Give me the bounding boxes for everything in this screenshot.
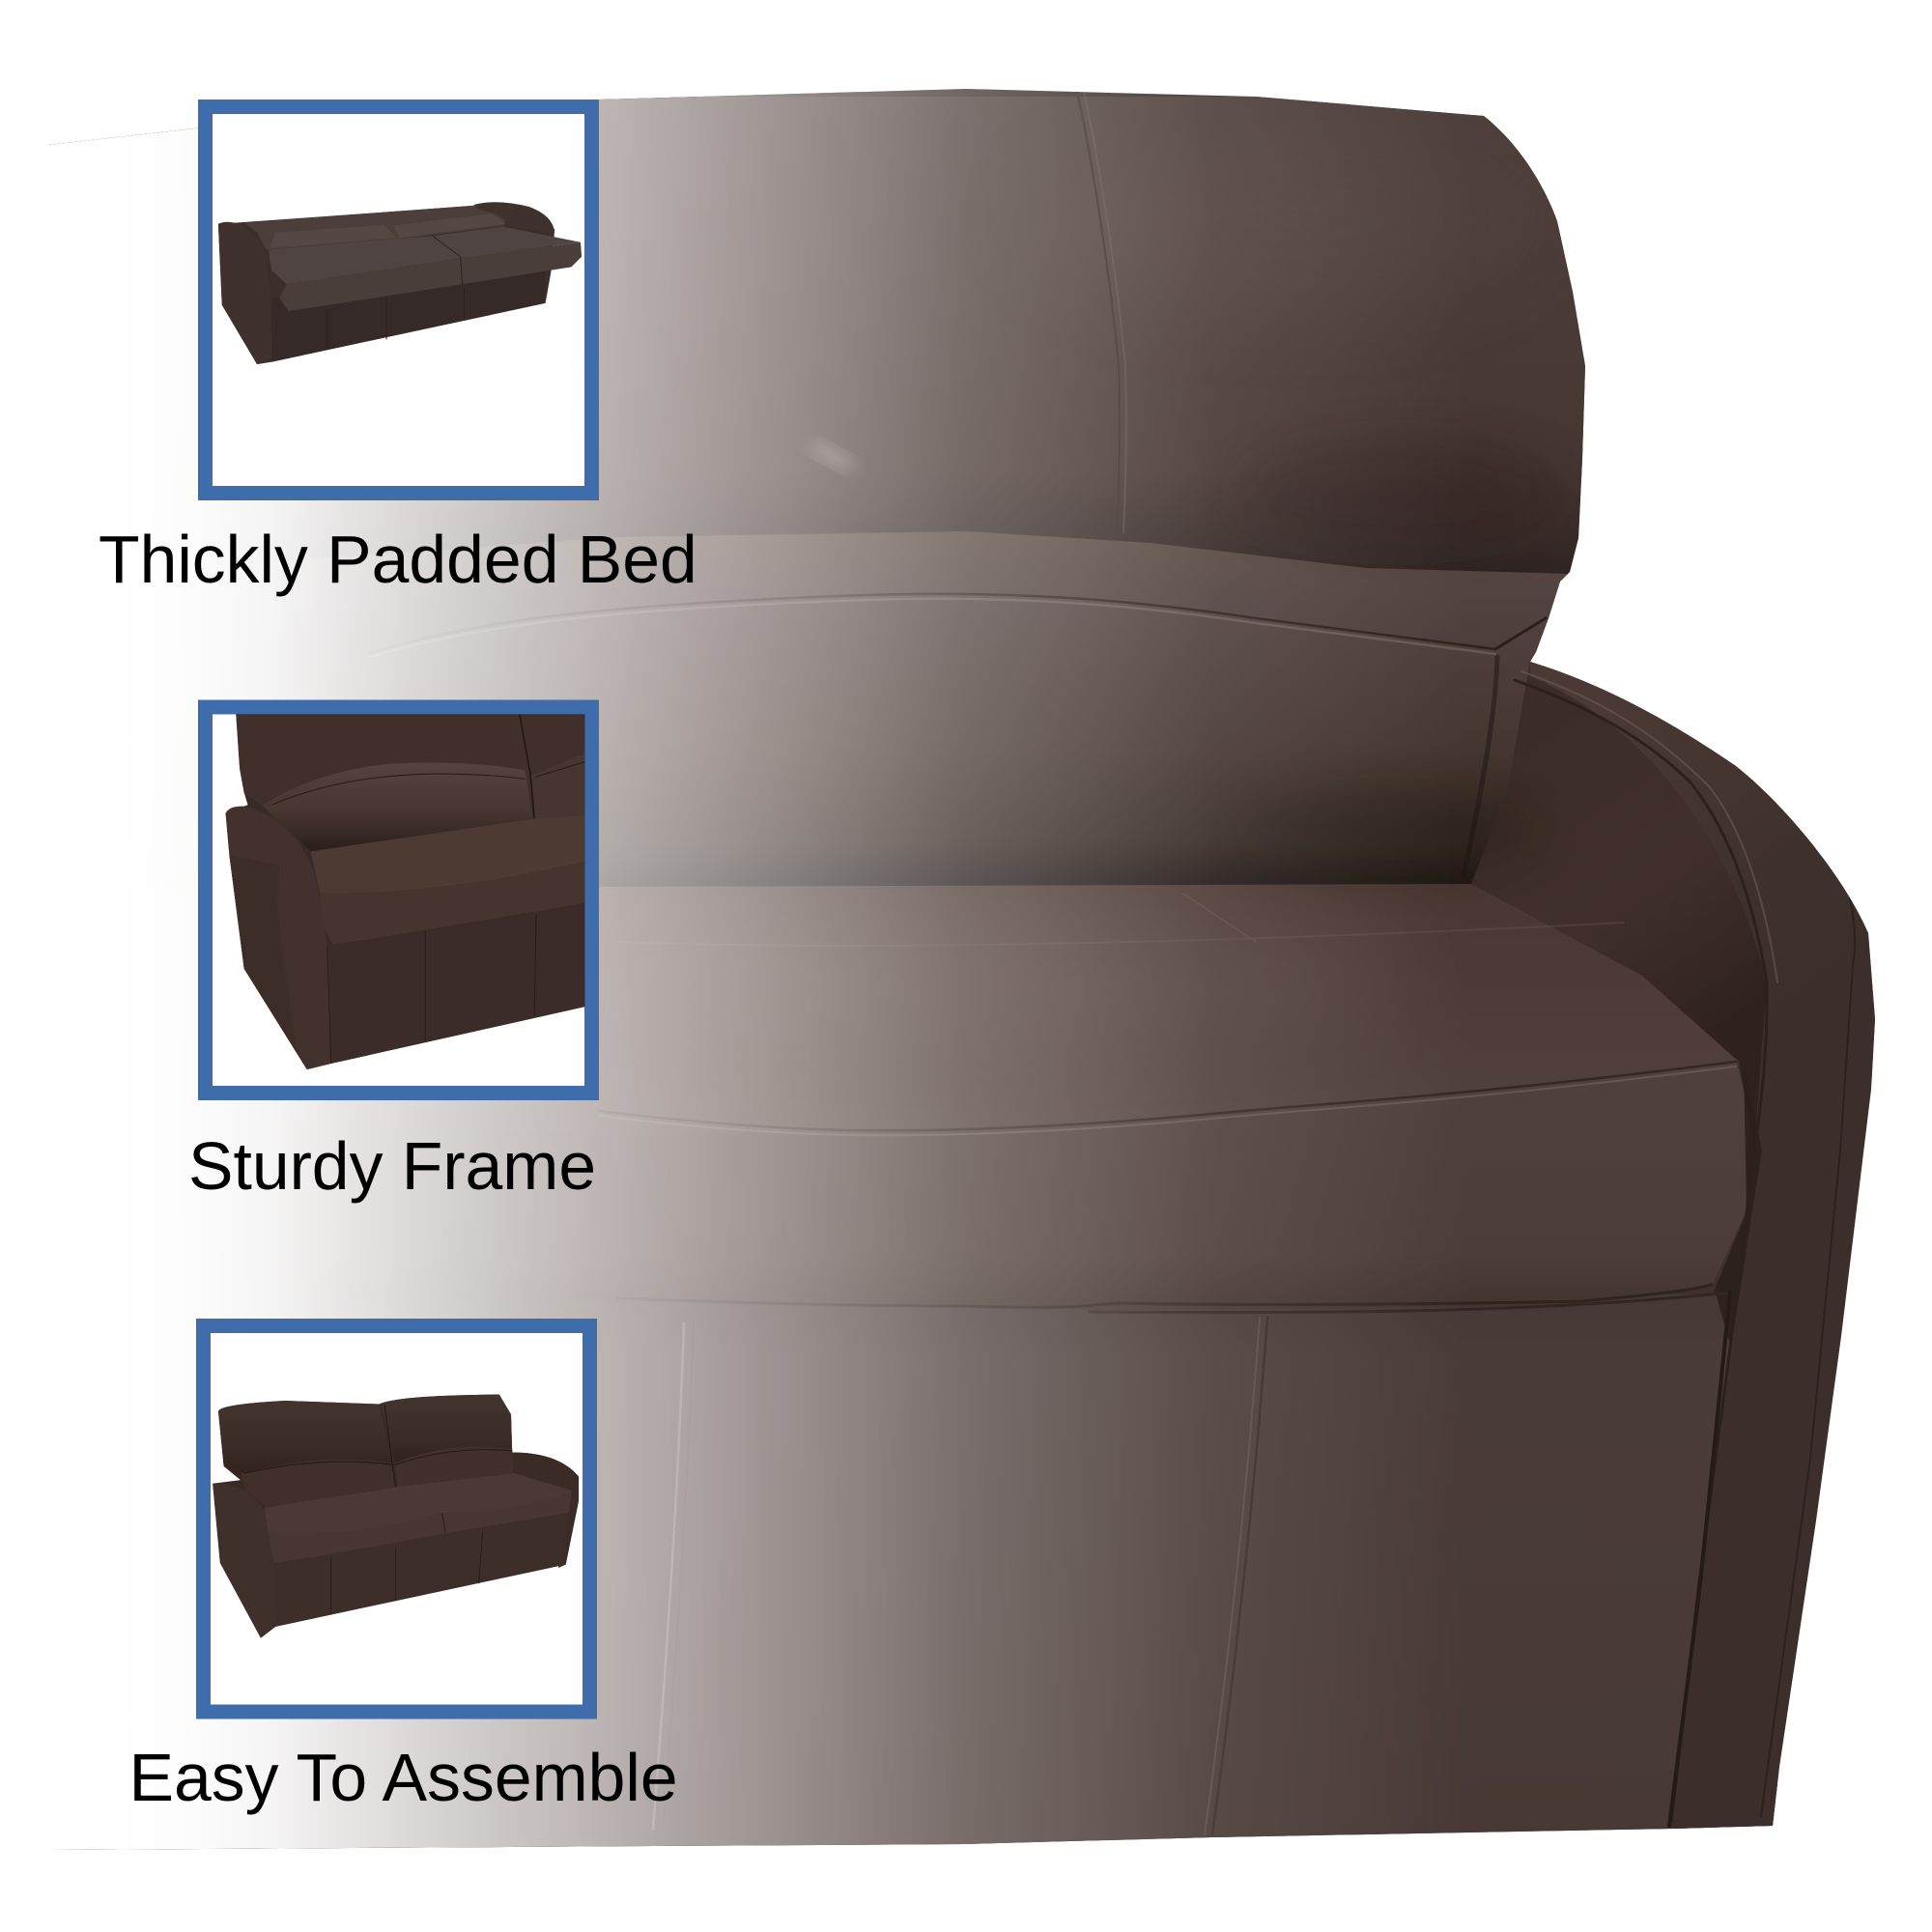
feature 2: caption: Sturdy Frame bbox=[188, 1128, 596, 1204]
blue frame bbox=[205, 106, 591, 493]
blue frame bbox=[203, 1325, 589, 1712]
sofa corner thumbnail bbox=[226, 714, 585, 1069]
feature 3: caption: Easy To Assemble bbox=[129, 1740, 678, 1815]
feature 3: thumbnail frame bbox=[203, 1325, 589, 1712]
stitched seams bbox=[370, 92, 1855, 1834]
feature 2: thumbnail frame bbox=[205, 707, 591, 1094]
headrest cushion bbox=[39, 97, 1604, 580]
blue frame bbox=[205, 707, 591, 1094]
feature 1: caption: Thickly Padded Bed bbox=[99, 522, 697, 597]
sofa bed thumbnail bbox=[218, 202, 582, 364]
white fade overlay bbox=[48, 89, 1366, 1850]
arm front band bbox=[1530, 662, 1879, 1831]
full sofa thumbnail bbox=[213, 1395, 579, 1638]
seat top bbox=[599, 884, 1739, 1134]
base panel bbox=[39, 1294, 1777, 1855]
feature 1: thumbnail frame bbox=[205, 106, 591, 493]
soft shading bbox=[628, 135, 1762, 1348]
seat front bbox=[736, 1063, 1747, 1287]
arm inner panel bbox=[1471, 662, 1767, 1151]
back cushion bbox=[485, 531, 1568, 887]
